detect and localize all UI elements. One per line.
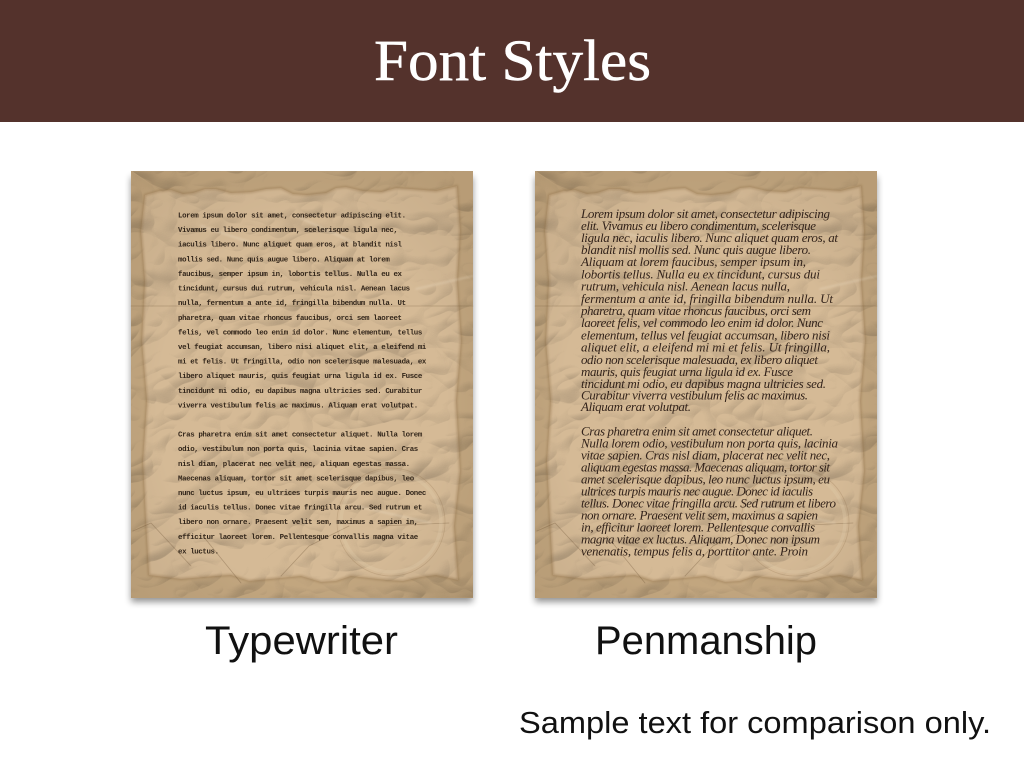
text block: typewriter sample text: ex luctus. xyxy=(178,548,219,556)
text block: penmanship sample text: ultrices turpis mauris nec augue. Donec id iaculis xyxy=(581,484,813,498)
text block: penmanship sample text: vitae sapien. Cras nisl diam, placerat nec velit nec, xyxy=(581,448,830,462)
text block: penmanship sample text: Nulla lorem odio, vestibulum non porta quis, lacinia xyxy=(580,436,838,450)
text block: penmanship sample text: odio non scelerisque malesuada, ex libero aliquet xyxy=(581,352,818,367)
title: Font Styles xyxy=(374,28,651,93)
text block: typewriter sample text: iaculis libero. Nunc aliquet quam eros, at blandit nisl xyxy=(178,242,403,250)
text block: penmanship sample text: tincidunt mi odio, eu dapibus magna ultricies sed. xyxy=(581,376,826,391)
header banner xyxy=(0,0,1024,122)
text block: typewriter sample text: Cras pharetra enim sit amet consectetur aliquet. Nulla lorem xyxy=(178,432,423,440)
text block: typewriter sample text: pharetra, quam vitae rhoncus faucibus, orci sem laoreet xyxy=(178,315,402,323)
text block: typewriter sample text: Vivamus eu libero condimentum, scelerisque ligula nec, xyxy=(178,227,398,235)
text block: penmanship sample text: elementum, tellus vel feugiat accumsan, libero nisi xyxy=(581,327,830,342)
text block: typewriter sample text: Lorem ipsum dolor sit amet, consectetur adipiscing elit. xyxy=(178,212,406,220)
text block: typewriter sample text: nulla, fermentum a ante id, fringilla bibendum nulla. Ut xyxy=(178,300,406,308)
text block: penmanship sample text: amet scelerisque dapibus, leo nunc luctus ipsum, eu xyxy=(581,472,830,486)
text block: typewriter sample text: libero aliquet mauris, quis feugiat urna ligula id ex. Fusce xyxy=(178,373,423,381)
text block: typewriter sample text: faucibus, semper ipsum in, lobortis tellus. Nulla eu ex xyxy=(178,271,403,279)
text block: penmanship sample text: fermentum a ante id, fringilla bibendum nulla. Ut xyxy=(581,291,833,306)
text block: typewriter sample text: nunc luctus ipsum, eu ultrices turpis mauris nec augue. Donec xyxy=(178,490,426,498)
text block: typewriter sample text: felis, vel commodo leo enim id dolor. Nunc elementum, tellus xyxy=(178,329,422,337)
text block: typewriter sample text xyxy=(178,212,427,556)
text block: penmanship sample text: Lorem ipsum dolor sit amet, consectetur adipiscing xyxy=(580,206,830,221)
text block: typewriter sample text: tincidunt, cursus dui rutrum, vehicula nisl. Aenean lacus xyxy=(178,286,410,294)
text block: penmanship sample text: magna vitae ex luctus. Aliquam, Donec non ipsum xyxy=(581,532,820,546)
text block: penmanship sample text: laoreet felis, vel commodo leo enim id dolor. Nunc xyxy=(581,315,823,330)
text block: penmanship sample text: Curabitur viverra vestibulum felis ac maximus. xyxy=(581,388,808,402)
text block: typewriter sample text: efficitur laoreet lorem. Pellentesque convallis magna vitae xyxy=(178,534,419,542)
text block: typewriter sample text: vel feugiat accumsan, libero nisi aliquet elit, a eleifend mi xyxy=(178,344,427,352)
text block: penmanship sample text: pharetra, quam vitae rhoncus faucibus, orci sem xyxy=(580,303,811,318)
panel: typewriter sample xyxy=(131,171,473,663)
text block: penmanship sample text: in, efficitur laoreet lorem. Pellentesque convallis xyxy=(581,520,815,534)
text block: penmanship sample text: rutrum, vehicula nisl. Aenean lacus nulla, xyxy=(581,279,790,294)
text block: penmanship sample text: Cras pharetra enim sit amet consectetur aliquet. xyxy=(581,424,813,438)
text block: typewriter sample text: libero non ornare. Praesent velit sem, maximus a sapien in, xyxy=(178,519,418,527)
text block: typewriter sample text: tincidunt mi odio, eu dapibus magna ultricies sed. Curabitur xyxy=(178,388,422,396)
text block: typewriter sample text: mollis sed. Nunc quis augue libero. Aliquam at lorem xyxy=(178,256,390,264)
text block: typewriter sample text: viverra vestibulum felis ac maximus. Aliquam erat volutpat. xyxy=(178,402,418,410)
label: penmanship: Penmanship xyxy=(595,619,817,663)
text block: penmanship sample text: venenatis, tempus felis a, porttitor ante. Proin xyxy=(581,544,808,558)
text block: typewriter sample text: mi et felis. Ut fringilla, odio non scelerisque malesuada, ex xyxy=(178,359,427,367)
text block: penmanship sample text: aliquet elit, a eleifend mi mi et felis. Ut fringilla, xyxy=(581,340,830,355)
text block: typewriter sample text: odio, vestibulum non porta quis, lacinia vitae sapien. Cras xyxy=(178,446,418,454)
text block: penmanship sample text: non ornare. Praesent velit sem, maximus a sapien xyxy=(581,508,818,522)
text block: penmanship sample text: aliquam egestas massa. Maecenas aliquam, tortor sit xyxy=(581,460,830,474)
text block: typewriter sample text: nisl diam, placerat nec velit nec, aliquam egestas massa. xyxy=(178,461,410,469)
text block: typewriter sample text: Maecenas aliquam, tortor sit amet scelerisque dapibus, leo xyxy=(178,475,415,483)
paper sheet: penmanship xyxy=(535,171,877,602)
text block: penmanship sample text xyxy=(580,206,838,558)
text block: penmanship sample text: Aliquam at lorem faucibus, semper ipsum in, xyxy=(580,254,806,269)
text block: penmanship sample text: elit. Vivamus eu libero condimentum, scelerisque xyxy=(581,218,816,233)
text block: penmanship sample text: mauris, quis feugiat urna ligula id ex. Fusce xyxy=(581,364,793,379)
label: typewriter: Typewriter xyxy=(205,619,398,663)
footnote: Sample text for comparison only. xyxy=(519,705,991,740)
panel: penmanship sample xyxy=(535,171,877,663)
text block: penmanship sample text: blandit nisl mollis sed. Nunc quis augue libero. xyxy=(581,242,811,257)
text block: typewriter sample text: id iaculis tellus. Donec vitae fringilla arcu. Sed rutrum et xyxy=(178,505,422,513)
text block: penmanship sample text: Aliquam erat volutpat. xyxy=(580,399,691,414)
text block: penmanship sample text: ligula nec, iaculis libero. Nunc aliquet quam eros, at xyxy=(581,230,838,245)
text block: penmanship sample text: tellus. Donec vitae fringilla arcu. Sed rutrum et libero xyxy=(581,496,836,510)
paper sheet: typewriter xyxy=(131,171,473,602)
text block: penmanship sample text: lobortis tellus. Nulla eu ex tincidunt, cursus dui xyxy=(581,266,820,281)
